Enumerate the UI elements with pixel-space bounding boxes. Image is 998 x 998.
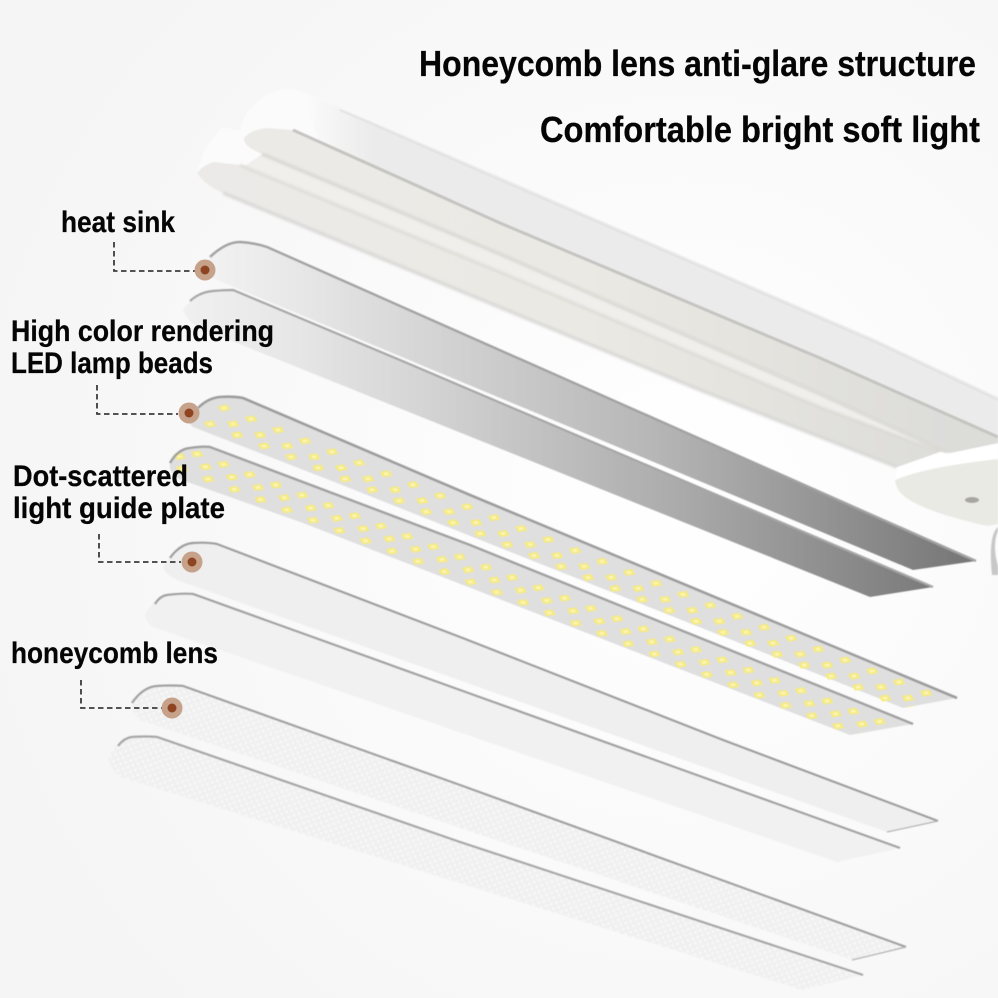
LED board plate [188,397,957,708]
rear guide body [145,594,900,862]
callout: heat sink [61,206,216,280]
label: honeycomb lens: honeycomb lens [11,637,218,670]
rear board top edge [170,447,913,724]
rear guide top edge [155,594,900,848]
rear lens body [108,736,863,990]
lamp rear rim shade [340,110,998,400]
guide plate top edge [170,543,938,821]
label: heat sink: heat sink [61,206,175,239]
leader line [81,680,162,708]
strip: heat sink rear [183,290,933,597]
leader line [99,534,181,562]
bracket hook [991,527,998,575]
strip: honeycomb lens rear [108,736,863,990]
rear top edge [190,290,933,587]
rear lens top edge [118,736,863,975]
strip: light guide plate rear [145,594,900,862]
rear plate [183,290,933,597]
honeycomb lens back edge [852,947,906,960]
strip: honeycomb lens front [132,686,906,960]
marker dot [162,698,182,718]
label line 2: light guide plate [13,492,225,525]
callout: honeycomb lens [11,637,218,718]
strip: heat sink front [205,242,976,570]
panel seam shading [223,154,948,467]
guide plate back edge [887,821,938,832]
label line 2: LED lamp beads [11,347,213,380]
marker dot [178,402,200,424]
bracket hole [965,497,979,503]
marker dot [194,260,216,280]
rear LED beads [170,444,915,737]
callout: LED lamp beads [11,315,274,424]
lamp mounting bracket [895,444,998,575]
heat sink plate [205,242,976,570]
lamp dark groove line [293,130,998,437]
upper light panel [244,128,998,453]
strip: light guide plate front [163,543,938,832]
bracket white lip [895,444,998,480]
leader line [114,242,195,271]
strip: LED board rear [170,444,915,737]
leader line [97,385,178,414]
rear board plate [170,447,913,735]
strip: LED board front [188,397,960,712]
guide plate body [163,543,938,832]
label line 1: Dot-scattered [13,460,188,493]
honeycomb lens top edge [132,686,906,947]
lamp top rear band [303,92,998,436]
lamp white housing [197,89,998,480]
LED beads [200,400,960,712]
lower light panel [197,162,940,467]
LED board top edge [198,397,957,698]
callout: light guide plate [13,460,225,572]
bracket plate [895,459,998,526]
heat sink top edge [210,242,976,561]
title: headline [419,43,980,150]
marker dot [182,552,202,572]
band between the two panels [245,154,948,453]
lamp head assembly [197,89,998,575]
honeycomb lens body [132,686,906,960]
label line 1: High color rendering [11,315,274,348]
